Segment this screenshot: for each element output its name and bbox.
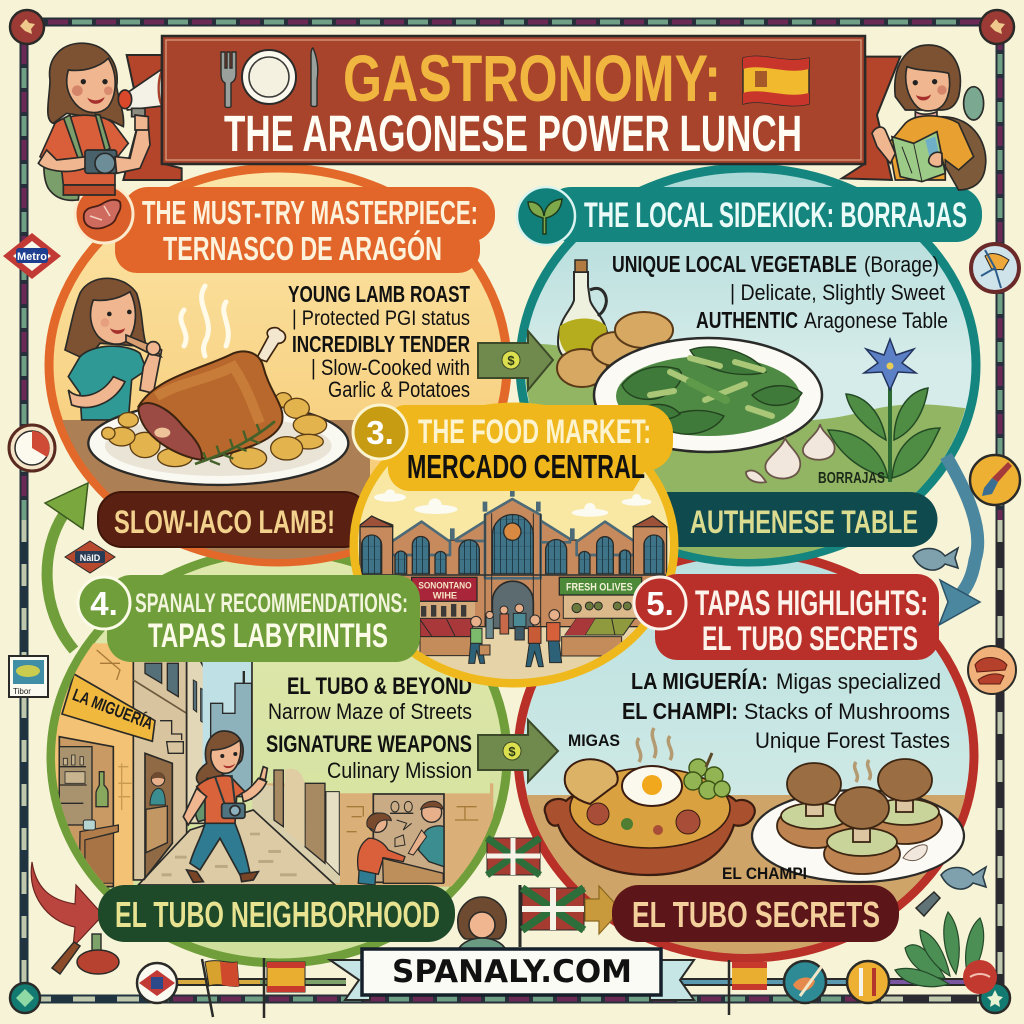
badge: number 4	[78, 577, 130, 629]
labels: migas and el champi: EL CHAMPI	[722, 864, 807, 883]
vendor	[421, 808, 442, 823]
arrow: money arrow top	[478, 331, 553, 390]
icon: map card	[9, 656, 48, 697]
arrow: gold arrow	[585, 886, 621, 934]
doorway with person	[145, 753, 172, 878]
icon: metro badge bottom	[137, 963, 177, 1003]
arrow: curved red arrow	[31, 862, 103, 947]
illustration: mushroom toasts	[752, 759, 964, 882]
text block: lamb facts: Garlic & Potatoes	[328, 377, 470, 402]
icon: compass map badge	[971, 244, 1019, 292]
arrow: curved green arrow	[45, 483, 88, 650]
illustration: migas dish	[545, 753, 755, 875]
footer pill: el tubo neighborhood: EL TUBO NEIGHBORHOOD	[115, 894, 440, 935]
text block: el tubo facts: SIGNATURE WEAPONS	[266, 731, 472, 758]
panel: borrajas circle	[510, 168, 980, 580]
text block: el tubo facts: Narrow Maze of Streets	[268, 699, 472, 724]
text block: lamb facts: YOUNG LAMB ROAST	[288, 281, 470, 307]
icon: knife	[311, 48, 318, 106]
illustration: plate with roast lamb and potatoes	[88, 328, 348, 485]
icon: kitchen tools	[52, 934, 119, 974]
illustration: olive oil bottle	[558, 260, 608, 364]
sign: somontano wine: SONONTANO	[418, 580, 472, 590]
footer pill: el tubo secrets	[612, 885, 899, 942]
illustration: market hall	[358, 466, 670, 679]
text block: tapas facts: Migas specialized	[776, 669, 941, 694]
street	[252, 783, 340, 883]
heading: the food market: THE FOOD MARKET:	[418, 413, 651, 451]
arrow: money arrow bottom: $	[508, 744, 516, 759]
text block: borrajas facts	[612, 251, 948, 333]
heading: spanaly recommendations: SPANALY RECOMMENDATIONS:	[135, 588, 408, 618]
heading: the must-try masterpiece: THE MUST-TRY MASTERPIECE:	[142, 194, 478, 231]
right shop	[340, 793, 372, 794]
heading: the local sidekick	[517, 187, 982, 245]
icon: fish lower	[941, 867, 986, 889]
building body	[360, 540, 665, 627]
shop interior	[59, 737, 113, 887]
customer	[358, 870, 376, 885]
text block: tapas facts: Stacks of Mushrooms	[744, 699, 950, 724]
heading: the must-try masterpiece	[75, 185, 495, 273]
sign: somontano wine: WIHE	[433, 590, 457, 600]
illustration: garlic	[746, 424, 835, 483]
arrow: money arrow bottom	[478, 720, 558, 782]
sign band	[62, 674, 155, 741]
footer pill: slow-iaco lamb	[98, 492, 368, 547]
illustration: top right traveller with map	[842, 45, 986, 190]
text block: lamb facts	[288, 281, 470, 402]
icon: chorizo badge	[968, 646, 1016, 694]
illustration: borage plant	[828, 339, 940, 482]
illustration: potatoes	[557, 312, 673, 387]
badge: number 5: 5.	[646, 585, 674, 622]
icon: craft badge	[784, 961, 826, 1003]
illustration: girl eating	[65, 278, 162, 420]
text block: tapas facts: EL CHAMPI:	[622, 698, 738, 724]
icon: basque flag upper	[487, 838, 540, 875]
text block: borrajas facts: AUTHENTIC	[696, 307, 798, 333]
text block: lamb facts: | Slow-Cooked with	[311, 355, 470, 380]
illustration: green leaves	[895, 912, 984, 987]
icon: megaphone	[118, 67, 175, 130]
icon: small flags on rail	[202, 958, 305, 1018]
text block: tapas facts: Unique Forest Tastes	[755, 728, 950, 753]
panel: food market circle	[350, 407, 680, 693]
footer pill: el tubo secrets: EL TUBO SECRETS	[632, 894, 880, 935]
icon: map card: Tibor	[13, 687, 31, 696]
panel: ternasco circle	[40, 168, 507, 565]
text block: borrajas facts: UNIQUE LOCAL VEGETABLE	[612, 251, 857, 277]
icon: plate	[242, 50, 296, 104]
title banner	[162, 36, 865, 164]
hills	[526, 344, 966, 559]
text block: lamb facts: INCREDIBLY TENDER	[292, 331, 470, 357]
bottom chain rail	[175, 978, 980, 986]
market windows	[362, 514, 664, 574]
text block: el tubo facts	[266, 673, 472, 783]
heading: spanaly recommendations	[78, 575, 420, 662]
labels: migas and el champi	[568, 731, 807, 883]
table	[526, 795, 966, 954]
sign: somontano wine	[418, 582, 472, 598]
badge: number 3: 3.	[366, 414, 394, 451]
panel: tapas labyrinths circle	[50, 551, 507, 963]
footer pill: authenese table: AUTHENESE TABLE	[690, 504, 918, 540]
icon: small tool	[916, 892, 940, 916]
icon: fish upper	[913, 548, 958, 570]
label: borrajas: BORRAJAS	[818, 470, 885, 487]
text block: borrajas facts: (Borage)	[864, 252, 939, 277]
illustration: person bust	[458, 897, 506, 950]
main doorway	[492, 581, 533, 628]
arrow: curved blue arrow	[939, 456, 980, 625]
labels: migas and el champi: MIGAS	[568, 731, 620, 750]
heading: spanaly recommendations: TAPAS LABYRINTHS	[148, 617, 388, 655]
sign: fresh olives: FRESH OLIVES	[566, 582, 633, 594]
icon: spanish flag bottom right	[729, 960, 767, 1015]
icon: steak	[75, 185, 133, 243]
shoppers	[469, 604, 562, 667]
icon: steam	[181, 286, 228, 356]
text block: tapas facts: LA MIGUERÍA:	[631, 667, 768, 694]
table	[62, 420, 370, 559]
text block: el tubo facts: EL TUBO & BEYOND	[287, 673, 472, 700]
text block: lamb facts: | Protected PGI status	[292, 307, 470, 330]
icon: small metro diamond	[65, 541, 115, 573]
arrow: money arrow top: $	[507, 353, 515, 368]
illustration: top left guide with megaphone	[38, 43, 182, 200]
heading: the food market	[353, 405, 673, 491]
stall left	[420, 602, 475, 618]
icon: leaf sprout	[517, 187, 575, 245]
illustration: alley scene	[50, 643, 493, 890]
banner ribbon: spanaly.com	[330, 949, 694, 1000]
panel: el tubo secrets circle	[510, 552, 980, 965]
title line one: GASTRONOMY:	[343, 41, 721, 115]
heading: tapas highlights	[634, 574, 939, 660]
badge: number 5	[634, 577, 686, 629]
text block: el tubo facts: Culinary Mission	[327, 758, 472, 783]
icon: clock	[9, 425, 55, 471]
footer pill: slow-iaco lamb: SLOW-IACO LAMB!	[114, 504, 335, 540]
text block: borrajas facts: Aragonese Table	[804, 308, 948, 333]
footer pill: el tubo neighborhood	[98, 885, 455, 942]
icon: paintbrush badge	[970, 455, 1020, 505]
heading: the must-try masterpiece: TERNASCO DE ARAGÓN	[163, 230, 442, 267]
icon: basque flag lower	[520, 885, 584, 947]
footer pill: authenese table	[660, 492, 938, 547]
icon: fork	[221, 52, 236, 108]
icon: metro sign: Metro	[17, 251, 47, 263]
icon: cutlery badge	[847, 961, 889, 1003]
banner ribbon: spanaly.com: SPANALY.COM	[392, 954, 632, 990]
text block: borrajas facts: | Delicate, Slightly Sweet	[730, 280, 945, 305]
icon: small metro diamond: NāID	[80, 553, 101, 563]
icon: red seal	[963, 960, 997, 994]
stall right	[563, 595, 638, 618]
heading: tapas highlights: EL TUBO SECRETS	[702, 620, 918, 658]
icon: spanish flag	[743, 56, 809, 106]
badge: number 3	[353, 405, 407, 459]
illustration: alley scene: LA MIGUERÍA	[70, 684, 156, 734]
heading: the food market: MERCADO CENTRAL	[407, 448, 645, 485]
icon: steam above dishes	[637, 728, 870, 782]
illustration: plate of borrajas	[594, 338, 822, 452]
icon: metro sign	[3, 233, 61, 279]
icon: map	[892, 132, 945, 182]
text block: tapas facts	[622, 667, 950, 753]
walking tourist	[183, 731, 267, 882]
badge: number 4: 4.	[90, 585, 118, 622]
